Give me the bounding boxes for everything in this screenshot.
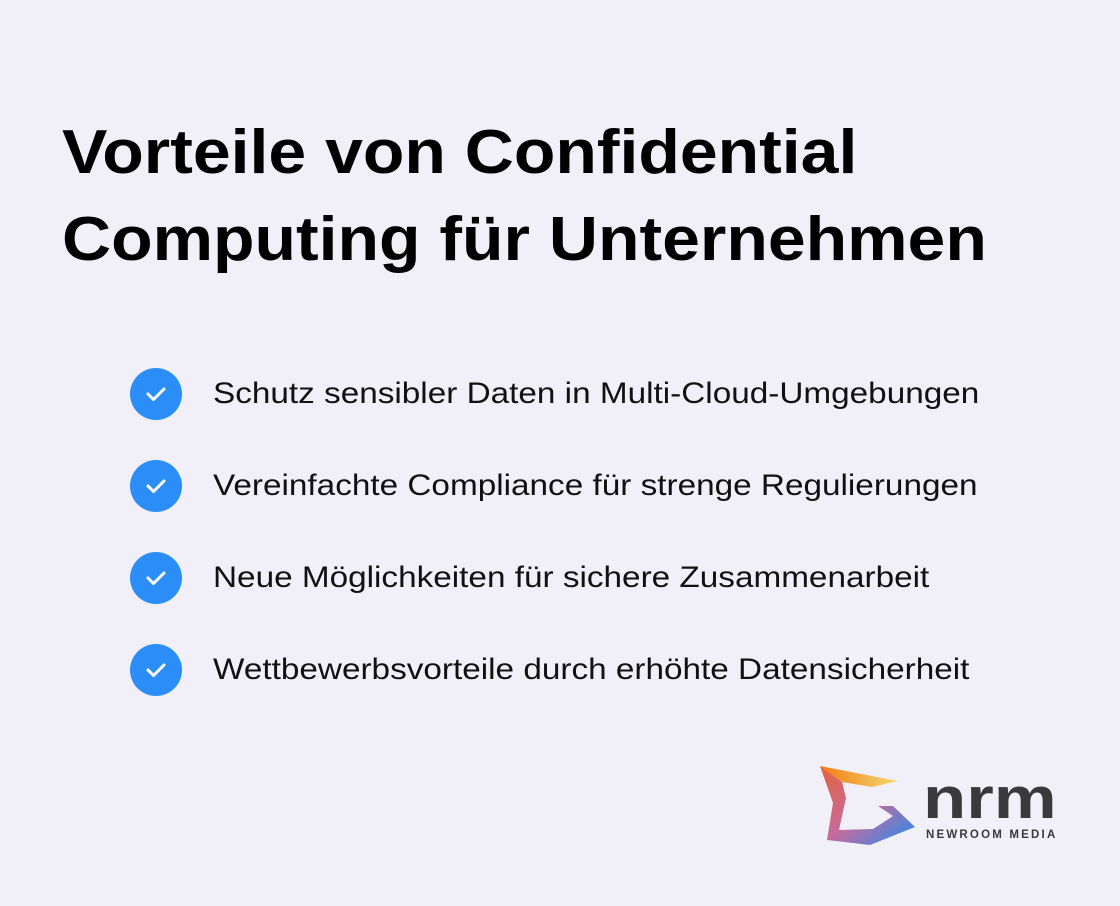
title: Computing für Unternehmen [62,205,987,274]
title: Vorteile von Confidential [62,118,857,187]
icon: check [130,368,182,420]
item 3 [130,552,929,604]
icon: check [130,644,182,696]
logo text: nrm [923,765,1057,831]
item 1 [130,368,979,420]
text: Schutz sensibler Daten in Multi-Cloud-Umgebungen [213,377,979,410]
title [62,118,987,274]
item 2 [130,460,978,512]
text: Vereinfachte Compliance für strenge Regulierungen [213,469,978,502]
icon: check [130,552,182,604]
logo mark [820,766,915,845]
logo text: NEWROOM MEDIA [926,829,1057,841]
text: Wettbewerbsvorteile durch erhöhte Datensicherheit [213,653,969,686]
item 4 [130,644,970,696]
icon: check [130,460,182,512]
text: Neue Möglichkeiten für sichere Zusammenarbeit [213,561,929,594]
